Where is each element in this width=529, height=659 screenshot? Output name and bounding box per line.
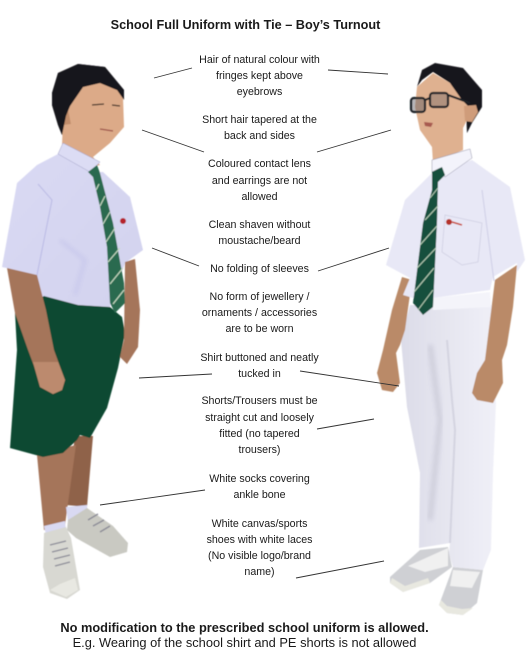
arms (7, 259, 140, 394)
callout lines (100, 68, 399, 578)
figure: boy in trousers (377, 63, 525, 615)
text: jewellery: are to be worn (225, 323, 294, 335)
text: clean shaven: moustache/beard (218, 235, 301, 247)
collar (432, 149, 472, 177)
tie (413, 167, 445, 315)
text: short hair: back and sides (224, 130, 295, 142)
ear (464, 105, 478, 122)
glasses (411, 93, 470, 112)
lips (424, 122, 433, 127)
trousers (401, 305, 496, 570)
text: sleeves: No folding of sleeves (210, 263, 309, 275)
shoes (390, 547, 483, 615)
neck and face (62, 83, 124, 168)
text: shorts and trousers: trousers) (239, 444, 280, 456)
school crest (446, 219, 462, 225)
legs (37, 436, 93, 530)
text: contact lens: allowed (241, 191, 278, 203)
facial features (92, 104, 120, 131)
school crest (120, 218, 126, 224)
belt area (432, 292, 491, 310)
hair back (52, 64, 124, 135)
text: contact lens: Coloured contact lens (208, 158, 311, 170)
text: socks: ankle bone (233, 489, 286, 501)
collar (58, 143, 100, 172)
text: shirt: Shirt buttoned and neatly (200, 352, 319, 364)
pocket (442, 215, 482, 265)
text: shoes: shoes with white laces (207, 534, 312, 546)
footer: example: E.g. Wearing of the school shirt and PE shorts is not allowed (73, 635, 416, 650)
title: School Full Uniform with Tie – Boy’s Turnout (111, 18, 381, 32)
text: jewellery: ornaments / accessories (202, 307, 317, 319)
neck and face (415, 73, 470, 163)
ear (58, 105, 71, 125)
tie (88, 165, 125, 313)
socks (44, 505, 88, 535)
hair back (417, 63, 482, 133)
text: contact lens: and earrings are not (212, 175, 307, 187)
text: shoes: (No visible logo/brand (208, 550, 311, 562)
text: short hair: Short hair tapered at the (202, 114, 317, 126)
text: shirt: tucked in (238, 368, 281, 380)
arms (377, 265, 517, 403)
text: shorts and trousers: Shorts/Trousers must be (201, 395, 318, 407)
text: shoes: White canvas/sports (212, 518, 307, 530)
shirt (386, 160, 525, 298)
text: clean shaven: Clean shaven without (209, 219, 310, 231)
text: socks: White socks covering (209, 473, 310, 485)
footer: rule: No modification to the prescribed school uniform is allowed. (60, 620, 429, 635)
hair front (52, 64, 124, 135)
figure: boy in shorts (2, 64, 143, 599)
shorts (10, 296, 125, 457)
shirt (2, 154, 143, 307)
shoes (43, 508, 128, 599)
text: jewellery: No form of jewellery / (210, 291, 309, 303)
text: shorts and trousers: straight cut and loosely (205, 412, 315, 424)
text: shoes: name) (244, 566, 275, 578)
text: hair colour: eyebrows (237, 86, 282, 98)
text: hair colour: fringes kept above (216, 70, 303, 82)
text: shorts and trousers: fitted (no tapered (219, 428, 300, 440)
text: hair colour: Hair of natural colour with (199, 54, 320, 66)
